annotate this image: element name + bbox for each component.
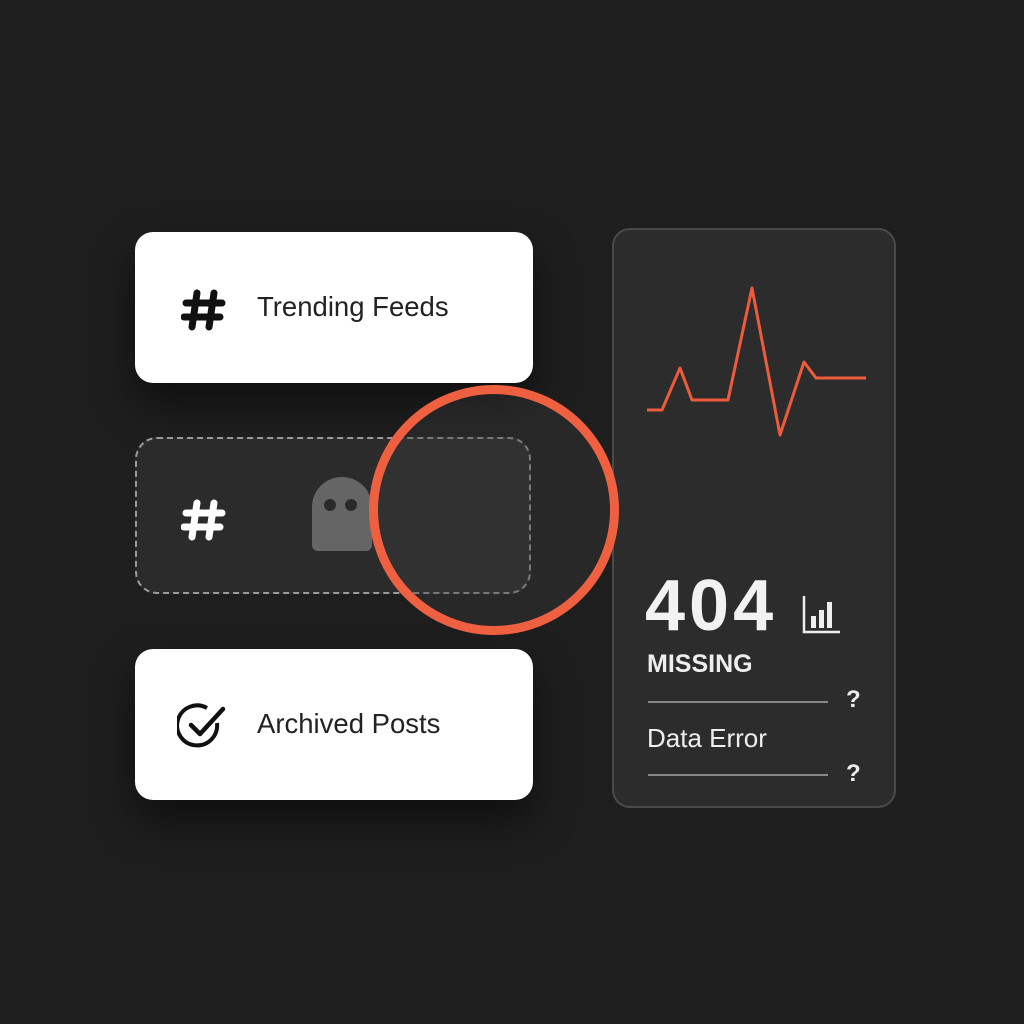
panel: trending feeds bbox=[135, 232, 533, 383]
icon: check circle bbox=[177, 703, 226, 748]
icon: hashtag bbox=[181, 290, 226, 330]
text: missing: MISSING bbox=[647, 650, 753, 678]
panel: status monitor bbox=[612, 228, 896, 808]
callout: red circle bbox=[369, 385, 619, 635]
text: question mark 1: ? bbox=[846, 686, 861, 713]
panel: archived posts bbox=[135, 649, 533, 800]
label: trending feeds: Trending Feeds bbox=[257, 291, 449, 322]
icon: ghost bbox=[312, 477, 372, 551]
icon: bar chart bbox=[802, 596, 840, 634]
panel: missing feed (dashed) bbox=[135, 437, 531, 594]
text: question mark 2: ? bbox=[846, 760, 861, 787]
text: 404: 404 bbox=[645, 566, 777, 646]
label: archived posts: Archived Posts bbox=[257, 708, 440, 739]
chart: heartbeat line bbox=[647, 286, 866, 436]
icon: hashtag white bbox=[181, 500, 226, 540]
text: data error: Data Error bbox=[647, 723, 767, 753]
